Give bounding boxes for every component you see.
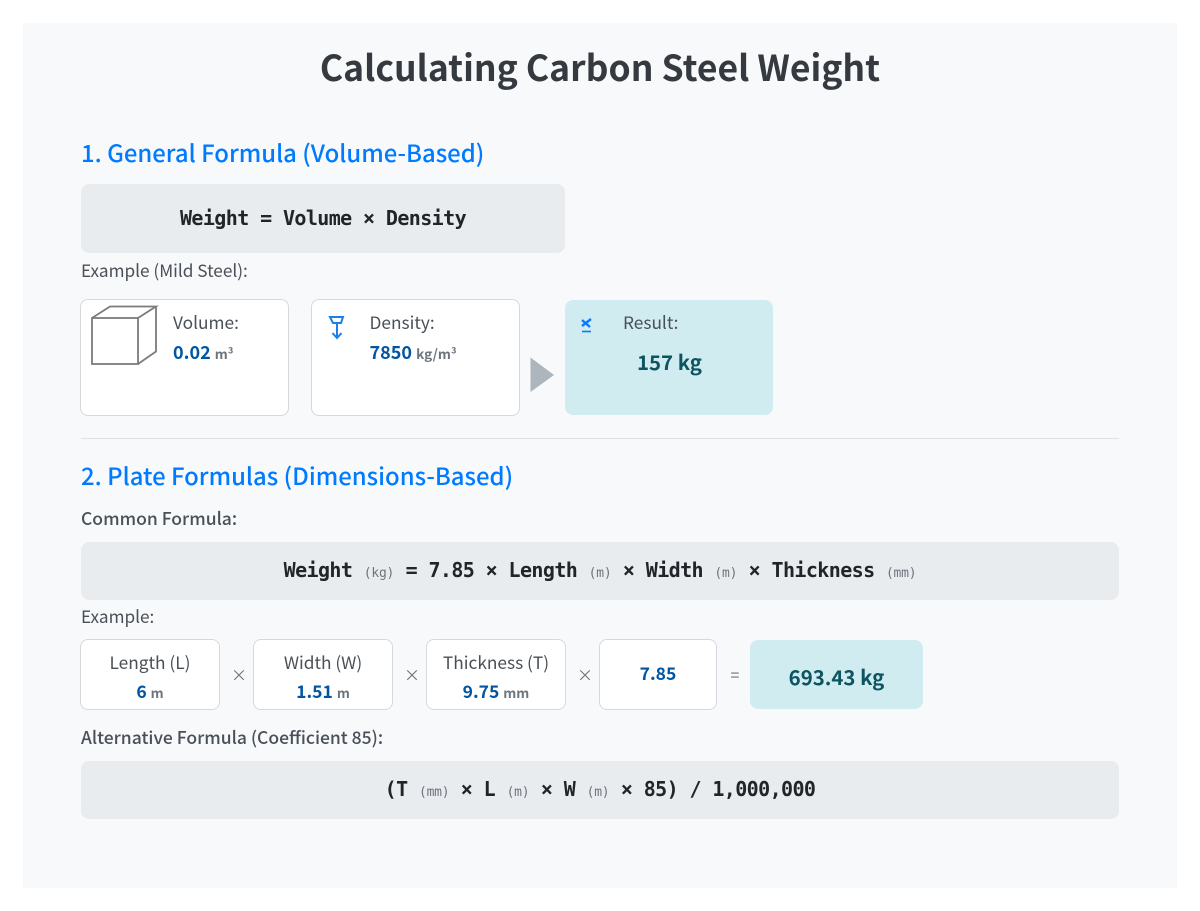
panel: volume card (80, 299, 289, 416)
text: length label: Length (L) (110, 649, 190, 674)
text: mild steel example label: Example (Mild Steel): (81, 257, 248, 282)
value: thickness: 9.75 mm (463, 679, 529, 704)
formula: alternative plate formula (81, 761, 1119, 819)
value: coefficient: 7.85 (640, 660, 676, 686)
formula: common plate formula (81, 542, 1119, 600)
text: alternative formula label: Alternative Formula (Coefficient 85): (81, 725, 383, 750)
value: result: 157 kg (637, 346, 702, 376)
panel: length card (80, 639, 220, 710)
text: thickness label: Thickness (T) (443, 649, 549, 674)
text: result label: Result: (623, 309, 678, 334)
value: plate weight: 693.43 kg (789, 660, 884, 690)
text: common formula label: Common Formula: (81, 506, 237, 531)
formula: common plate formula: Weight (kg) = 7.85 × Length (m) × Width (m) × Thickness (mm) (284, 558, 916, 582)
formula: alternative plate formula: (T (mm) × L (m) × W (m) × 85) / 1,000,000 (385, 777, 815, 801)
value: width: 1.51 m (296, 679, 350, 704)
icon: cube (91, 306, 159, 365)
panel: coefficient card (599, 639, 717, 710)
heading: section 2: 2. Plate Formulas (Dimensions-Based) (81, 457, 513, 492)
arrow: to result (530, 358, 554, 392)
value: volume: 0.02 m³ (173, 339, 234, 365)
panel: result card (565, 300, 773, 415)
text: density label: Density: (370, 309, 435, 334)
formula: weight equals volume times density (81, 184, 565, 253)
value: length: 6 m (136, 679, 164, 704)
formula: weight equals volume times density: Weight = Volume × Density (180, 206, 466, 230)
operator: times: × (231, 662, 247, 686)
icon: result (581, 318, 592, 332)
panel: width card (253, 639, 393, 710)
icon: density (328, 316, 344, 340)
title: Calculating Carbon Steel Weight (320, 41, 880, 92)
operator: equals: = (731, 662, 739, 686)
divider (81, 438, 1119, 439)
panel: thickness card (426, 639, 566, 710)
panel: plate result (750, 640, 923, 709)
operator: times: × (404, 662, 420, 686)
text: width label: Width (W) (284, 649, 362, 674)
text: example label: Example: (81, 603, 154, 628)
heading: section 1: 1. General Formula (Volume-Based) (81, 134, 484, 169)
value: density: 7850 kg/m³ (370, 339, 457, 365)
text: volume label: Volume: (173, 309, 239, 334)
panel: density card (311, 299, 520, 416)
operator: times: × (577, 662, 593, 686)
